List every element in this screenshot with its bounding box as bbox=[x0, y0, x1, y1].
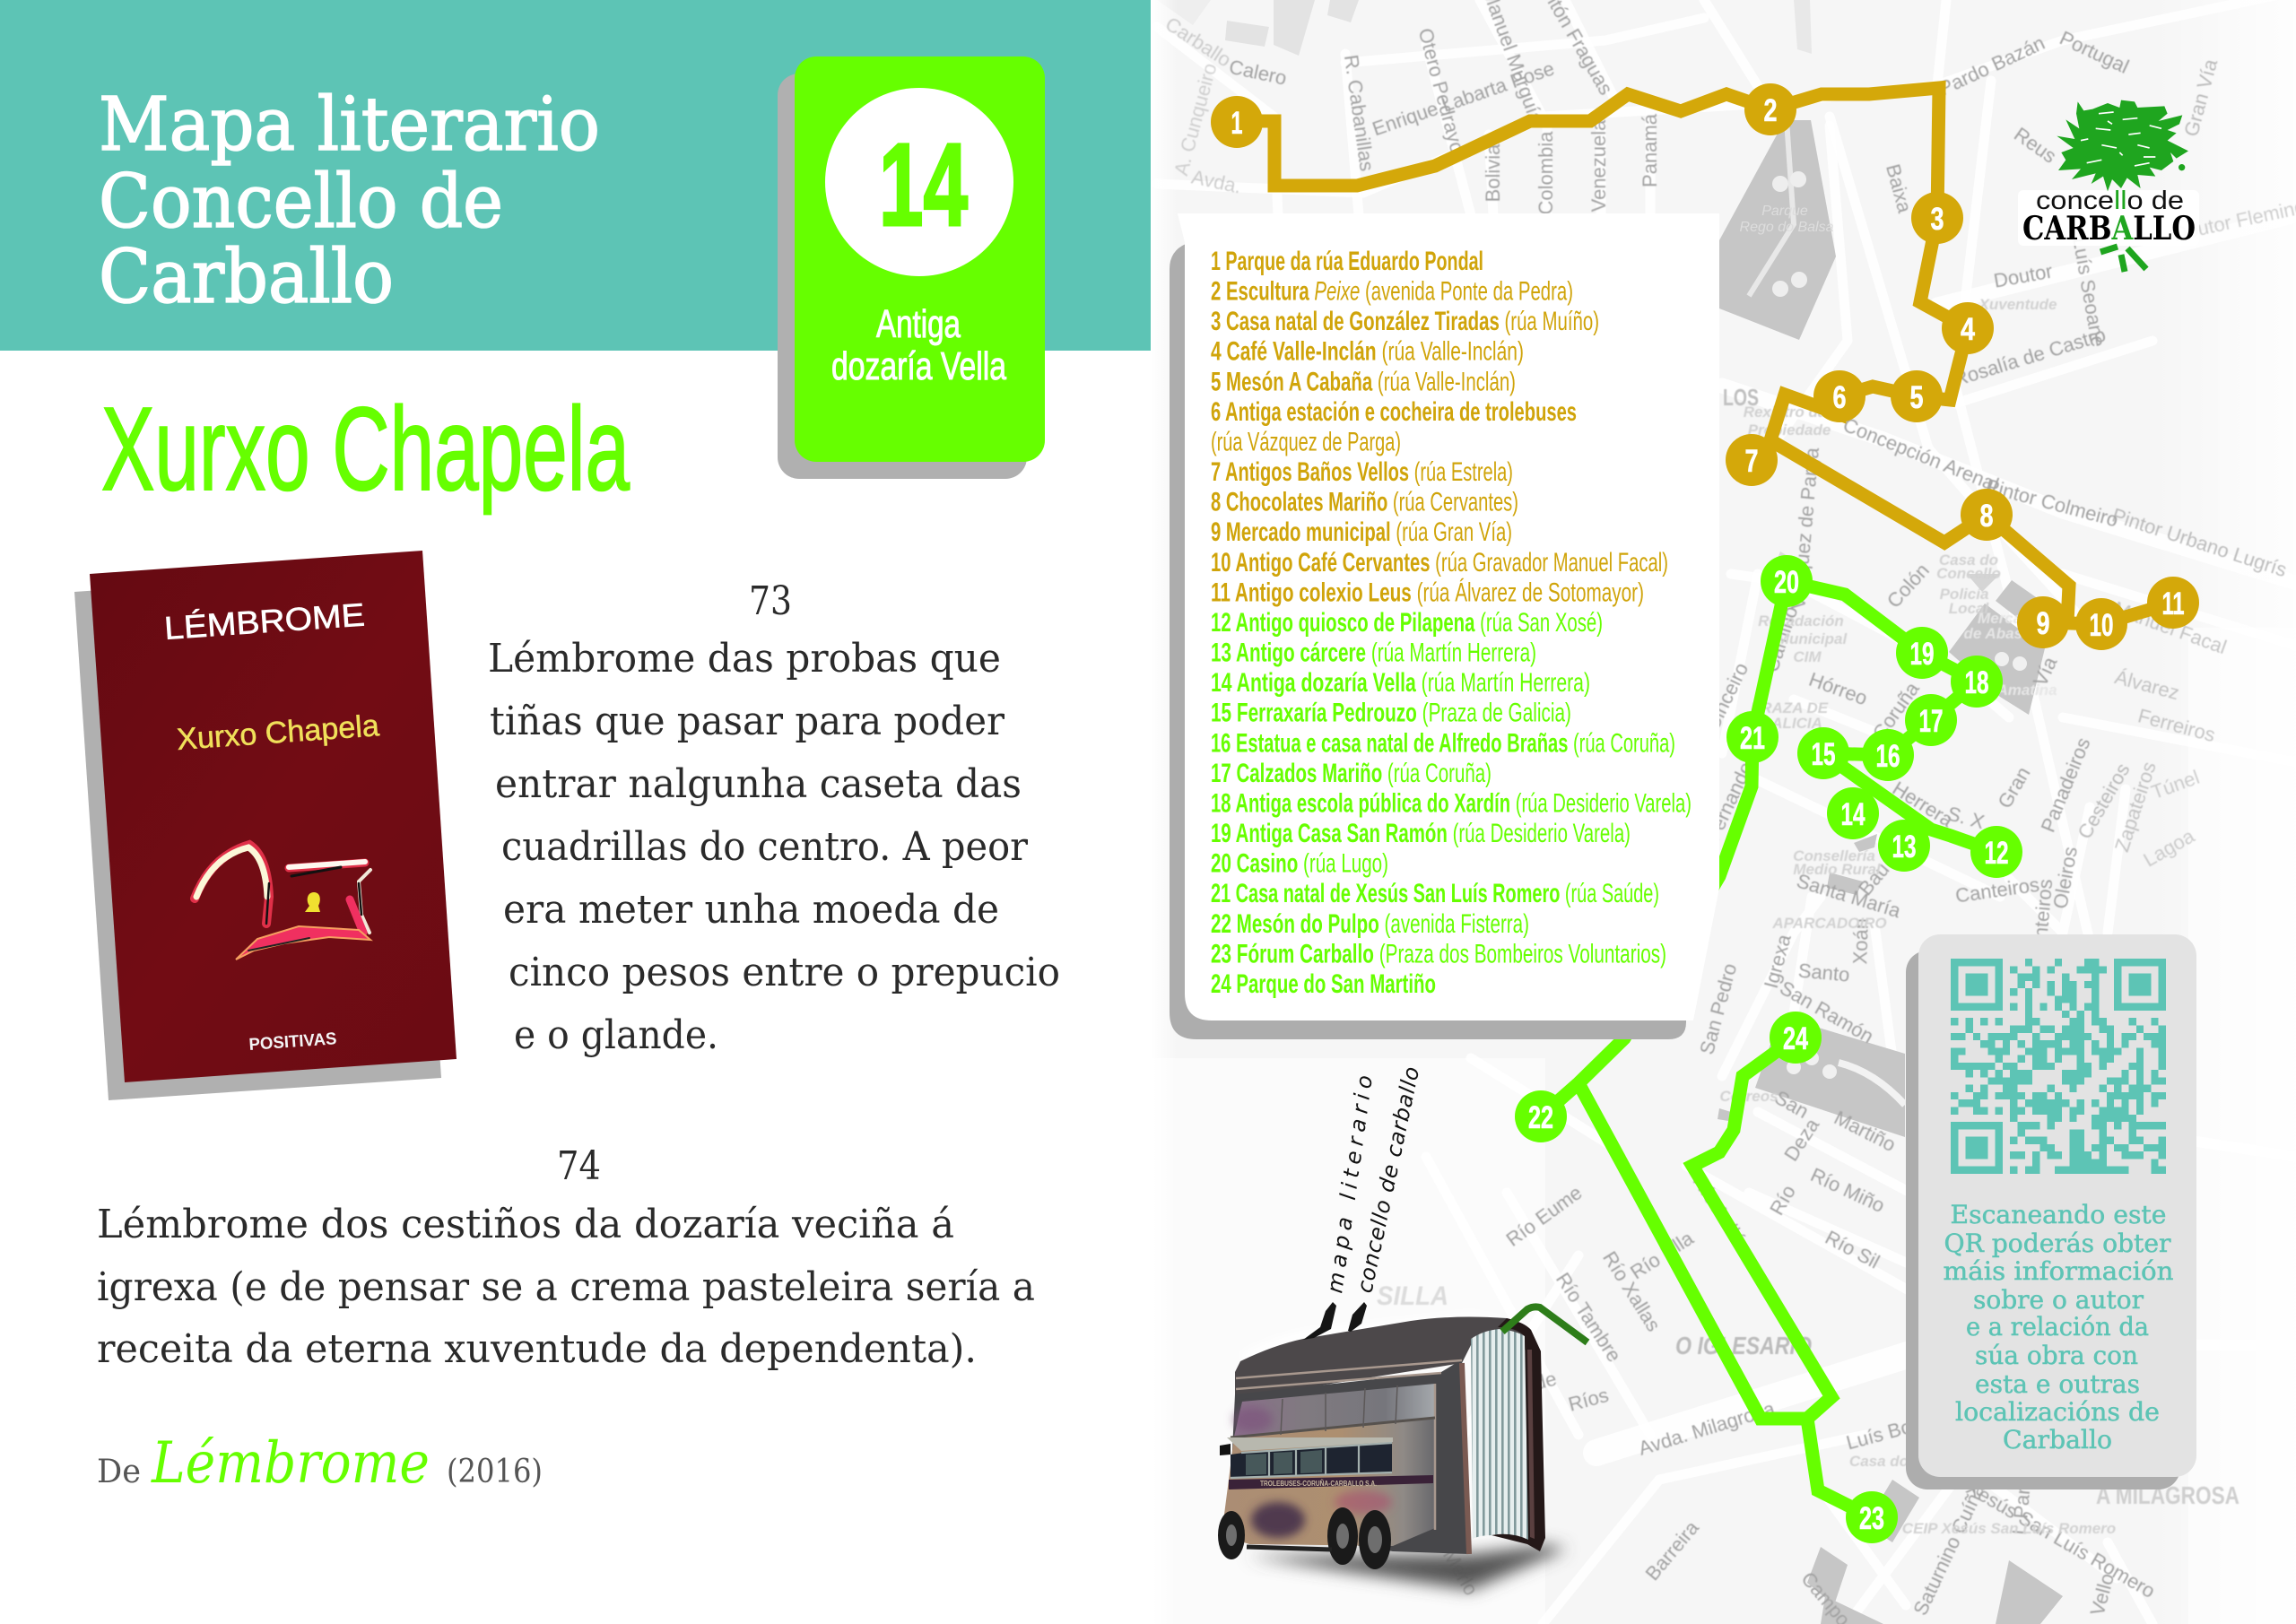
panel: map background: Fernando bbox=[1701, 759, 1757, 845]
panel: map background: Concello bbox=[1936, 565, 2001, 582]
title: Mapa literario bbox=[99, 83, 600, 168]
panel: map background: Río Xallas bbox=[1598, 1247, 1665, 1335]
bus windows bbox=[1220, 1437, 1393, 1478]
panel: map background: Canteiros bbox=[1954, 873, 2040, 908]
legend: gold entries bbox=[1211, 247, 1668, 607]
legend: green entries: 23 Fórum Carballo (Praza dos Bombeiros Voluntarios) bbox=[1211, 939, 1666, 968]
panel: map background: Cesteiros bbox=[2073, 760, 2135, 843]
legend: gold entries: 4 Café Valle-Inclán (rúa Valle-Inclán) bbox=[1211, 337, 1524, 367]
legend: green entries: 24 Parque do San Martiño bbox=[1211, 969, 1436, 999]
bus name stripe bbox=[1229, 1475, 1433, 1489]
panel: map background: Carpinteiros bbox=[2025, 878, 2057, 986]
book cover bbox=[74, 551, 457, 1100]
panel: map background: Amatina bbox=[1996, 682, 2057, 699]
panel: map background: Zapateiros bbox=[2110, 759, 2161, 855]
bus panels bbox=[1229, 1359, 1469, 1554]
stop 2 bbox=[1744, 83, 1796, 135]
author name: Xurxo Chapela bbox=[101, 383, 630, 515]
stop 11: 11 bbox=[2161, 586, 2185, 621]
legend: green entries bbox=[1211, 608, 1692, 999]
panel: map background: Calero bbox=[1227, 56, 1289, 90]
panel: map background: Casa do bbox=[1849, 1453, 1909, 1470]
panel: map background: GALICIA bbox=[1760, 715, 1822, 732]
text block: fragment 73: era meter unha moeda de bbox=[503, 887, 999, 933]
panel: map background: Rexistro da bbox=[1744, 404, 1826, 421]
panel: map background: Portugal bbox=[2057, 27, 2133, 78]
legend: green entries: 20 Casino (rúa Lugo) bbox=[1211, 849, 1388, 879]
stop 10 bbox=[2075, 598, 2127, 650]
icon: oak tree bbox=[2057, 100, 2188, 191]
panel: map background: Santo bbox=[1797, 960, 1850, 986]
QR caption bbox=[1943, 1200, 2174, 1455]
panel: map background: Bolivia bbox=[1482, 143, 1504, 202]
book back cover bbox=[1492, 1318, 1545, 1551]
stop 12: 12 bbox=[1984, 836, 2009, 871]
panel: map background: Bau bbox=[1854, 858, 1893, 899]
panel: map background: Gran bbox=[1993, 763, 2035, 812]
cover author: Xurxo Chapela bbox=[176, 708, 380, 757]
panel: map background: Correos bbox=[1719, 1088, 1779, 1105]
trolley poles bbox=[1303, 1302, 1367, 1340]
panel: map background: Rosalía de Castro bbox=[1951, 323, 2109, 391]
panel: map background: Avda. bbox=[1189, 165, 1243, 198]
legend: green entries: 14 Antiga dozaría Vella (rúa Martín Herrera) bbox=[1211, 668, 1590, 698]
stop 4 bbox=[1942, 302, 1994, 354]
stop 5: 5 bbox=[1910, 380, 1923, 415]
panel: map background: R. Cabanillas bbox=[1340, 53, 1378, 172]
stop 16: 16 bbox=[1876, 739, 1900, 774]
stop 21: 21 bbox=[1740, 721, 1765, 756]
panel: map background: Propiedade bbox=[1748, 421, 1831, 439]
stop 13 bbox=[1878, 820, 1930, 872]
panel: map background: Carballo bbox=[1161, 13, 1235, 72]
stop 8 bbox=[1961, 489, 2013, 541]
panel: map background: Reus bbox=[2010, 123, 2061, 168]
panel: map background: CIM bbox=[1793, 648, 1822, 665]
legend: green entries: 12 Antigo quiosco de Pilapena (rúa San Xosé) bbox=[1211, 608, 1603, 638]
stop 10: 10 bbox=[2090, 608, 2113, 643]
panel: map background: Baixa bbox=[1882, 161, 1917, 216]
logo text: concello de: conce llo de bbox=[2036, 187, 2184, 215]
legend: gold entries: 9 Mercado municipal (rúa Gran Vía) bbox=[1211, 517, 1512, 547]
QR caption: QR poderás obter bbox=[1944, 1229, 2171, 1258]
panel: map background: Pintor Colmeiro bbox=[1983, 474, 2120, 531]
legend: green entries: 21 Casa natal de Xesús San Luís Romero (rúa Saúde) bbox=[1211, 879, 1659, 908]
stop 23: 23 bbox=[1859, 1501, 1884, 1536]
panel: park Rego do Balsa: Parque bbox=[1761, 204, 1808, 219]
panel: map background: de bbox=[1532, 1368, 1559, 1394]
stop 6: 6 bbox=[1833, 380, 1846, 415]
stop 12 bbox=[1970, 826, 2022, 878]
panel: map background: San Pedro bbox=[1695, 961, 1741, 1057]
legend: gold entries: 10 Antigo Café Cervantes (rúa Gravador Manuel Facal) bbox=[1211, 548, 1668, 578]
panel: map background: Xuventude bbox=[1979, 296, 2057, 313]
text block: fragment 73: cinco pesos entre o prepucio bbox=[509, 950, 1060, 995]
panel: map background: Ríos bbox=[1566, 1384, 1611, 1416]
stop 23 bbox=[1846, 1491, 1898, 1543]
panel: park Rego do Balsa bbox=[1719, 120, 1836, 340]
badge label: dozaría Vella bbox=[831, 344, 1006, 388]
legend: green entries: 19 Antiga Casa San Ramón (rúa Desiderio Varela) bbox=[1211, 819, 1631, 848]
route: green line bbox=[1541, 581, 1996, 1517]
panel: map background: Luís Seoane bbox=[2068, 236, 2109, 349]
panel: map background: Policía bbox=[1940, 586, 1988, 603]
legend: gold entries: 11 Antigo colexio Leus (rúa Álvarez de Sotomayor) bbox=[1211, 578, 1644, 607]
panel: map background: Local bbox=[1949, 600, 1989, 617]
QR caption: sobre o autor bbox=[1973, 1285, 2144, 1315]
panel: map background: Recadación bbox=[1758, 612, 1844, 630]
stop 3: 3 bbox=[1930, 202, 1944, 237]
panel: map background: Saturnino Cuíña bbox=[1909, 1480, 1989, 1619]
QR caption: Escaneando este bbox=[1950, 1200, 2167, 1229]
panel: map background: CEIP Xesús San Luís Romero bbox=[1902, 1520, 2116, 1537]
stop 22 bbox=[1515, 1090, 1567, 1142]
panel: map background: San Ramón bbox=[1776, 977, 1877, 1047]
stop 17 bbox=[1905, 694, 1957, 746]
QR caption: máis información bbox=[1943, 1256, 2174, 1286]
text block: fragment 73: Lémbrome das probas que bbox=[488, 636, 1001, 682]
QR caption: súa obra con bbox=[1975, 1341, 2138, 1370]
badge number: 14 bbox=[879, 118, 968, 250]
panel: QR code card bbox=[1906, 934, 2196, 1489]
panel: map background: A. Cunqueiro bbox=[1170, 61, 1221, 178]
panel: map background: Concepción Arenal bbox=[1840, 413, 2002, 496]
text block: fragment 73: tiñas que pasar para poder bbox=[490, 699, 1005, 744]
text block: fragment 73: e o glande. bbox=[514, 1012, 718, 1058]
stop 9: 9 bbox=[2036, 606, 2050, 641]
title: Concello de bbox=[99, 160, 503, 245]
panel: map background: Río Eume bbox=[1502, 1181, 1587, 1251]
panel: map background: Mercado bbox=[1978, 610, 2040, 627]
panel: map background: Lagoa bbox=[2140, 824, 2199, 872]
cover publisher: POSITIVAS bbox=[248, 1029, 337, 1055]
text block: fragment 74: Lémbrome dos cestiños da dozaría veciña á bbox=[97, 1202, 954, 1247]
panel: map background: LOS bbox=[1723, 384, 1759, 411]
text: concello de carballo: concello de carballo bbox=[1352, 1064, 1424, 1295]
cover title: LÉMBROME bbox=[163, 595, 366, 647]
badge label bbox=[831, 302, 1006, 388]
header band bbox=[0, 0, 1151, 351]
stop 1 bbox=[1211, 96, 1263, 148]
panel: map background: Avda. Milagrosa bbox=[1636, 1397, 1778, 1460]
panel: map background: Río Ulla bbox=[1626, 1227, 1698, 1284]
stop 19: 19 bbox=[1910, 637, 1934, 672]
bus name stripe: TROLEBUSES-CORUÑA-CARBALLO S.A. bbox=[1260, 1480, 1377, 1488]
text block: fragment 74: igrexa (e de pensar se a crema pasteleira sería a bbox=[97, 1264, 1035, 1310]
panel: map background: Vía bbox=[2029, 653, 2062, 690]
panel: map background: Álvarez bbox=[2112, 665, 2182, 704]
stop 24 bbox=[1770, 1012, 1822, 1064]
panel: map background: PRAZA DE bbox=[1751, 699, 1829, 716]
panel: map background: Panamá bbox=[1639, 113, 1661, 187]
text block: fragment 73: cuadrillas do centro. A peor bbox=[501, 824, 1029, 870]
stop 16 bbox=[1862, 729, 1914, 781]
stop 6 bbox=[1813, 370, 1866, 422]
panel: map background: Santa María bbox=[1794, 869, 1904, 923]
legend: gold entries: 1 Parque da rúa Eduardo Pondal bbox=[1211, 247, 1483, 276]
stop 19 bbox=[1896, 627, 1948, 679]
panel: map background: S. X bbox=[1945, 802, 1987, 833]
panel: map background: Martiño bbox=[1831, 1107, 1900, 1156]
legend: green entries: 17 Calzados Mariño (rúa Coruña) bbox=[1211, 759, 1492, 788]
stop 4: 4 bbox=[1961, 312, 1975, 347]
stop 7: 7 bbox=[1745, 444, 1758, 479]
panel: map background: de Abastos bbox=[1963, 625, 2046, 642]
source citation: Lémbrome bbox=[151, 1430, 430, 1497]
panel: map background: Xoán bbox=[1848, 918, 1873, 965]
text block: fragment 73: entrar nalgunha caseta das bbox=[495, 761, 1022, 807]
QR code bbox=[1951, 959, 2166, 1174]
legend: green entries: 13 Antigo cárcere (rúa Martín Herrera) bbox=[1211, 638, 1536, 667]
panel: map background: SILLA bbox=[1377, 1281, 1448, 1311]
panel: map background: Pintor Urbano Lugrís bbox=[2109, 504, 2290, 581]
stop 5 bbox=[1891, 370, 1943, 422]
QR caption: esta e outras bbox=[1975, 1369, 2140, 1399]
panel: map background: Río Miño bbox=[1807, 1163, 1888, 1217]
panel: map background: Medio Rural bbox=[1793, 861, 1882, 878]
panel: map background: Vello bbox=[2086, 1571, 2118, 1618]
text block: fragment 74 bbox=[97, 1143, 1035, 1372]
trolleybus book illustration bbox=[1218, 1302, 1587, 1590]
panel: map background: Merlo bbox=[1439, 1545, 1483, 1599]
panel: map background: Deza bbox=[1779, 1114, 1824, 1165]
logo: Concello de Carballo bbox=[2018, 100, 2199, 272]
stop 20 bbox=[1761, 555, 1813, 607]
stop 22: 22 bbox=[1528, 1100, 1553, 1135]
legend: gold entries: (rúa Vázquez de Parga) bbox=[1211, 427, 1401, 457]
stop 15 bbox=[1797, 727, 1849, 779]
book pages bbox=[1471, 1329, 1529, 1541]
legend: gold entries: 2 Escultura Peixe (avenida Ponte da Pedra) bbox=[1211, 277, 1573, 307]
legend: gold entries: 6 Antiga estación e cocheira de trolebuses bbox=[1211, 397, 1577, 427]
stop 8: 8 bbox=[1980, 499, 1993, 534]
legend: gold entries: 8 Chocolates Mariño (rúa Cervantes) bbox=[1211, 488, 1518, 517]
logo text: CARBALLO: CARBALLO bbox=[2022, 210, 2196, 248]
panel: map background: Pardo Bazán bbox=[1935, 31, 2048, 100]
panel: stop badge bbox=[778, 56, 1045, 479]
stop 1: 1 bbox=[1231, 106, 1243, 141]
stop 2: 2 bbox=[1763, 93, 1778, 128]
panel: map background: Consellería bbox=[1793, 847, 1875, 864]
ribbon bookmark bbox=[1502, 1307, 1587, 1342]
legend: gold entries: 7 Antigos Baños Vellos (rúa Estrela) bbox=[1211, 457, 1513, 487]
stop 15: 15 bbox=[1812, 737, 1835, 772]
panel: map background: Municipal bbox=[1777, 630, 1848, 647]
source citation: (2016) bbox=[447, 1454, 543, 1490]
panel: map background: Vázquez de Parga bbox=[1787, 446, 1823, 611]
text block: fragment 74: receita da eterna xuventude da dependenta). bbox=[97, 1326, 977, 1372]
panel: map background: Casa do bbox=[1939, 551, 1998, 569]
panel: map background bbox=[1151, 0, 2296, 1624]
panel: map background: Río Anllóns bbox=[1688, 1170, 1761, 1266]
panel: map background: Río Sil bbox=[1822, 1226, 1883, 1273]
stop 3 bbox=[1911, 192, 1963, 244]
stop 14 bbox=[1827, 787, 1879, 839]
cover artwork bbox=[195, 845, 370, 960]
panel: map background: Colón bbox=[1883, 559, 1934, 612]
text block: fragment 74: 74 bbox=[557, 1143, 601, 1189]
legend: gold entries: 3 Casa natal de González Tiradas (rúa Muíño) bbox=[1211, 307, 1599, 336]
stop 7 bbox=[1726, 434, 1778, 486]
panel: route legend bbox=[1170, 213, 1719, 1039]
panel: map background: Barreira bbox=[1641, 1516, 1703, 1585]
panel: map background: Manuel Facal bbox=[2110, 597, 2230, 658]
stop 14: 14 bbox=[1840, 797, 1866, 832]
panel: map background: Doutor bbox=[1992, 260, 2054, 292]
panel: map background: Hórreo bbox=[1806, 668, 1870, 709]
stop 18 bbox=[1951, 656, 2003, 708]
panel: map background: Cinceiro bbox=[1700, 659, 1752, 734]
panel: map background: Venezuela bbox=[1587, 119, 1610, 212]
text block: fragment 73 bbox=[488, 578, 1060, 1058]
text block: fragment 73: 73 bbox=[749, 578, 792, 624]
panel: map background: San bbox=[1771, 1086, 1813, 1123]
panel: map background: Xesús San Luís Romero bbox=[1962, 1476, 2159, 1602]
legend: green entries: 22 Mesón do Pulpo (avenida Fisterra) bbox=[1211, 909, 1529, 939]
legend: green entries: 15 Ferraxaría Pedrouzo (Praza de Galicia) bbox=[1211, 699, 1571, 728]
panel: map background: Herrera bbox=[1889, 777, 1958, 831]
panel: map background: Panadeiros bbox=[2037, 734, 2094, 835]
markers: gold stops bbox=[1211, 83, 2199, 650]
badge label: Antiga bbox=[876, 302, 961, 346]
legend: gold entries: 5 Mesón A Cabaña (rúa Valle-Inclán) bbox=[1211, 367, 1516, 396]
QR caption: Carballo bbox=[2003, 1425, 2112, 1455]
panel: map background: I. Parga bbox=[2008, 1464, 2036, 1536]
panel: map background: Igrexa bbox=[1760, 932, 1796, 991]
stop 24: 24 bbox=[1783, 1021, 1808, 1056]
panel: map background: APARCADOIRO bbox=[1771, 915, 1887, 932]
panel: park Rego do Balsa: Rego do Balsa bbox=[1740, 220, 1834, 235]
legend: green entries: 18 Antiga escola pública do Xardín (rúa Desiderio Varela) bbox=[1211, 788, 1692, 818]
panel: map background: Enrique Labarta Pose bbox=[1370, 56, 1557, 140]
panel: map background: Túnel bbox=[2148, 766, 2203, 803]
panel: map background: Colombia bbox=[1535, 131, 1557, 214]
QR caption: localizacións de bbox=[1955, 1397, 2160, 1427]
panel: map background: Luís Bo bbox=[1844, 1415, 1914, 1454]
title: Carballo bbox=[99, 235, 394, 320]
stop 20: 20 bbox=[1774, 565, 1799, 600]
source citation: De bbox=[97, 1454, 141, 1490]
panel: map background: Otero Pedrayo bbox=[1414, 26, 1469, 155]
panel: map background: Ferreiros bbox=[2135, 704, 2218, 746]
panel: map background: Camiño bbox=[1760, 604, 1802, 675]
panel: map background: A MILAGROSA bbox=[2096, 1481, 2239, 1509]
text: mapa literario: mapa literario bbox=[1322, 1073, 1378, 1295]
legend: green entries: 16 Estatua e casa natal de Alfredo Brañas (rúa Coruña) bbox=[1211, 728, 1675, 758]
panel: map background: Gran Vía bbox=[2179, 56, 2222, 139]
route: gold line bbox=[1238, 88, 2173, 624]
markers: green stops bbox=[1515, 555, 2022, 1543]
stop 18: 18 bbox=[1964, 665, 1989, 700]
wheels bbox=[1218, 1507, 1391, 1569]
stop 9 bbox=[2017, 596, 2069, 648]
icon: tree roots bbox=[2100, 247, 2146, 272]
stop 11 bbox=[2147, 577, 2199, 629]
stop 13: 13 bbox=[1892, 829, 1916, 864]
QR caption: e a relación da bbox=[1966, 1312, 2149, 1342]
stop 21 bbox=[1726, 711, 1779, 763]
panel: map background: Oleiros bbox=[2048, 845, 2082, 910]
stop 17: 17 bbox=[1919, 704, 1943, 739]
panel: map background: Coruña bbox=[1868, 677, 1924, 743]
panel: map background: Río bbox=[1765, 1181, 1800, 1219]
title bbox=[99, 83, 600, 320]
panel: map background: O IGLESARIO bbox=[1675, 1332, 1812, 1359]
panel: map background: Río Tambre bbox=[1552, 1269, 1626, 1366]
bus roof bbox=[1235, 1317, 1541, 1399]
